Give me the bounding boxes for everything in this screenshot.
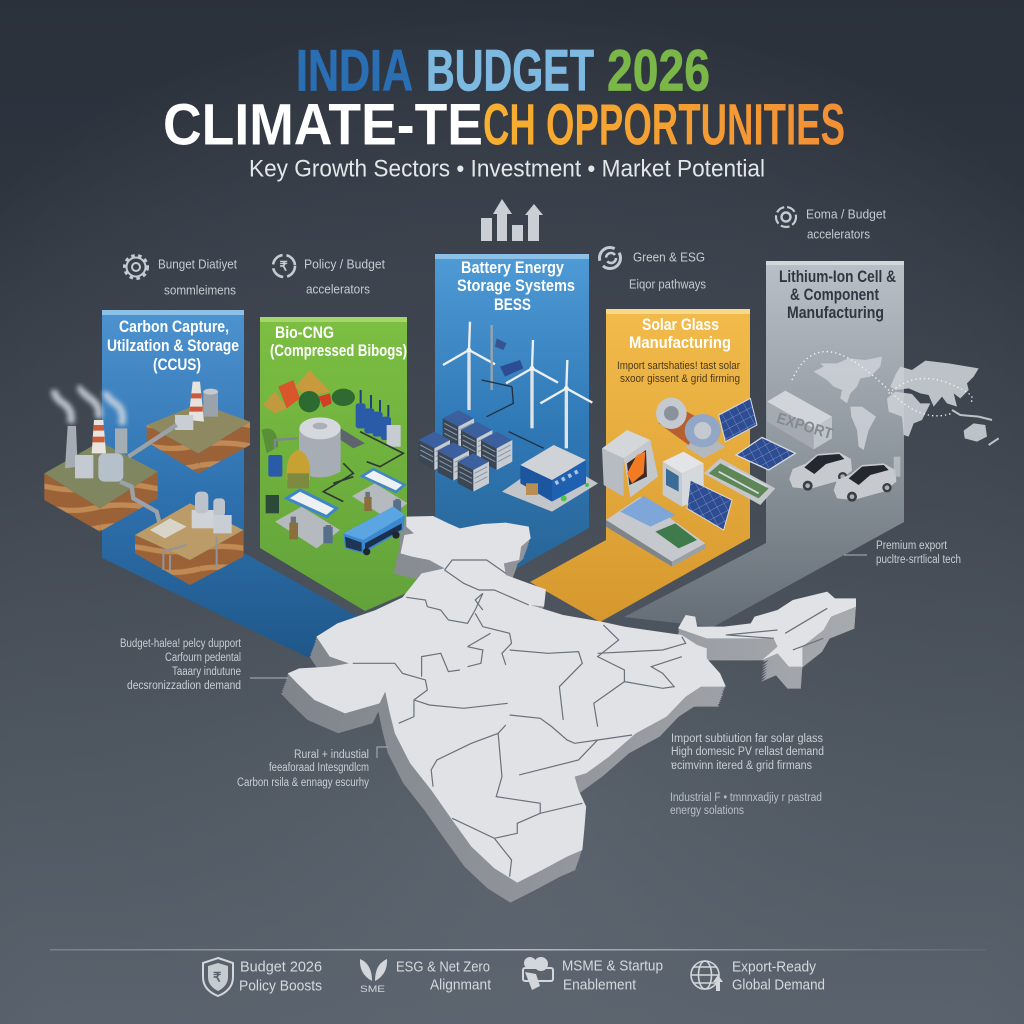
Bio-CNG heading: Bio-CNG: [275, 324, 334, 342]
top label: budget gear: [124, 256, 237, 298]
shipping container: [767, 391, 834, 449]
top label: green ESG: [600, 248, 706, 292]
footer: ESG: ESG & Net Zero: [396, 958, 490, 976]
electric cars: [789, 452, 900, 502]
callout: CCUS: Budget-halea! pelcy dupport: [120, 638, 242, 650]
battery racks: [419, 410, 512, 492]
footer: budget policy: [203, 958, 322, 996]
digester tank: [299, 417, 365, 477]
grid cable: [509, 432, 544, 448]
bus: [343, 507, 405, 555]
lithium-ion heading: Manufacturing: [787, 304, 884, 322]
illustration: BESS turbines and batteries: [419, 322, 523, 492]
solar heading: [629, 316, 731, 352]
map land surface: [288, 516, 856, 883]
callout: solar glass: [671, 733, 824, 772]
panel: CCUS: [102, 310, 360, 668]
top label: export budget: [776, 206, 886, 242]
CCUS heading: (CCUS): [153, 356, 201, 374]
solar panel upper: [719, 398, 757, 442]
panel: lithium-ion: [624, 261, 904, 627]
illustration: solar glass factory: [602, 398, 795, 567]
title line 1: 2026: [607, 38, 710, 104]
callout: solar glass: Import subtiution far solar glass: [671, 733, 823, 745]
footer: MSME: [523, 957, 663, 994]
callout: Bio-CNG: Carbon rsila & ennagy escurhy: [237, 777, 369, 789]
callout: Bio-CNG: feeaforaad Intesgndlcm: [269, 762, 369, 774]
rotary kiln: [656, 398, 725, 458]
top label: green ESG: Green & ESG: [633, 250, 705, 264]
footer: export: Global Demand: [732, 976, 825, 994]
footer: MSME: Enablement: [563, 976, 637, 994]
illustration: lithium-ion export: [767, 352, 999, 502]
footer: ESG: Alignmant: [430, 976, 492, 994]
callout: BESS: energy solations: [670, 805, 744, 817]
illustration: BESS right side: [502, 340, 598, 512]
top label: export budget: accelerators: [807, 226, 870, 242]
callout: Bio-CNG: Rural + industial: [294, 749, 369, 761]
title: [163, 38, 845, 158]
callout: lithium-ion: pucltre-srrtlical tech: [876, 554, 961, 566]
footer: budget policy: Budget 2026: [240, 958, 322, 976]
callout: lithium-ion: [844, 540, 961, 566]
BESS heading: [457, 259, 575, 314]
panel: solar glass: [530, 309, 750, 622]
panel: Bio-CNG: [260, 317, 425, 611]
solar description: Import sartshaties! tast solar: [617, 360, 740, 372]
solar heading: Solar Glass: [642, 316, 719, 334]
solar panel tilted: [687, 480, 732, 530]
title line 1: [296, 38, 710, 104]
solar description: sxoor gissent & grid firming: [620, 373, 740, 385]
footer: ESG: [360, 958, 492, 994]
capture block: stacks: [44, 420, 158, 532]
feedstock piles: [263, 370, 355, 413]
icon: rupee shield: ₹: [213, 970, 222, 984]
callout: solar glass: High domesic PV rellast demand: [671, 746, 824, 758]
title line 2: [163, 92, 845, 158]
control building: [502, 445, 598, 512]
illustration: Bio-CNG plant: [262, 370, 407, 555]
icon: gear: [124, 256, 148, 278]
footer: MSME: MSME & Startup: [562, 958, 663, 974]
footer: export: [691, 958, 825, 994]
circuit assembly line: [704, 458, 775, 505]
icon: leaves: SME: [360, 984, 385, 994]
storage block: upper: [147, 382, 250, 473]
callout: CCUS: Carfourn pedental: [165, 652, 241, 664]
icon: target swirl: [600, 248, 620, 268]
title line 2: CLIMATE-TE: [163, 92, 483, 158]
filling stations: [275, 469, 407, 548]
shipping container: EXPORT: [775, 410, 834, 443]
export routes: [792, 352, 972, 416]
callout: CCUS: [120, 638, 288, 692]
footer: export: Export-Ready: [732, 958, 816, 976]
callout: BESS: Industrial F • tmnnxadjiy r pastrad: [670, 792, 822, 804]
subtitle: Key Growth Sectors • Investment • Market Potential: [249, 156, 765, 182]
turbine one: [443, 322, 495, 410]
illustration: CCUS carbon sites: [44, 382, 250, 585]
top label: budget gear: Bunget Diatiyet: [158, 256, 237, 272]
footer rule: [50, 949, 986, 950]
top label: policy rupee: [273, 255, 385, 296]
top label: green ESG: Eiqor pathways: [629, 276, 706, 292]
turbines two and three: [506, 340, 592, 448]
icon: globe and arrow: [691, 961, 723, 991]
small vessels: [262, 429, 310, 488]
callout: CCUS: Taaary indutune: [172, 666, 241, 678]
gas cylinders: [356, 390, 401, 447]
lithium-ion heading: & Component: [790, 286, 879, 304]
callout: lithium-ion: Premium export: [876, 540, 948, 552]
map extruded walls: [281, 518, 856, 903]
footer: budget policy: Policy Boosts: [239, 978, 322, 994]
CCUS heading: Utilzation & Storage: [107, 337, 239, 355]
lithium-ion heading: [779, 268, 896, 322]
BESS heading: Battery Energy: [461, 259, 565, 277]
Bio-CNG heading: (Compressed Bibogs): [270, 342, 407, 360]
lithium-ion heading: Lithium-Ion Cell &: [779, 268, 896, 286]
glass coating machine: [606, 496, 705, 567]
top label: budget gear: sommleimens: [164, 282, 236, 298]
top label: export budget: Eoma / Budget: [806, 206, 886, 222]
top label: policy rupee: Policy / Budget: [304, 256, 385, 272]
CCUS heading: Carbon Capture,: [119, 318, 229, 336]
furnace: [602, 430, 658, 497]
Bio-CNG heading: [270, 324, 407, 360]
control cabinet: [663, 452, 704, 507]
pipe network: [323, 432, 403, 502]
CO2 pipelines: [120, 425, 177, 525]
BESS heading: Storage Systems: [457, 277, 575, 295]
icon: gear drop: [776, 207, 796, 227]
storage block: lower: [135, 492, 243, 585]
callout: Bio-CNG: [237, 747, 388, 789]
green containers: [266, 495, 279, 513]
CCUS heading: [107, 318, 239, 374]
callout: CCUS: decsronizzadion demand: [127, 680, 241, 692]
world map: [814, 357, 999, 450]
callout: BESS: [670, 792, 822, 817]
solar description: [617, 360, 740, 385]
title line 1: BUDGET: [426, 38, 594, 104]
BESS heading: BESS: [494, 296, 531, 314]
map: India: [281, 516, 856, 903]
icon: growth bars and arrows: [481, 199, 543, 241]
top label: policy rupee: accelerators: [306, 282, 370, 296]
map state borders: [353, 560, 827, 877]
smoke plumes: [55, 387, 122, 425]
title line 1: INDIA: [296, 38, 413, 104]
solar heading: Manufacturing: [629, 334, 731, 352]
panel: BESS: [435, 254, 589, 572]
icon: rupee cycle: ₹: [280, 258, 288, 274]
callout: solar glass: ɐcimvinn itered & grid firmans: [671, 760, 812, 772]
solar panel flat: [736, 437, 795, 470]
icon: gear network: [523, 957, 553, 990]
grid pylon: [482, 325, 523, 417]
